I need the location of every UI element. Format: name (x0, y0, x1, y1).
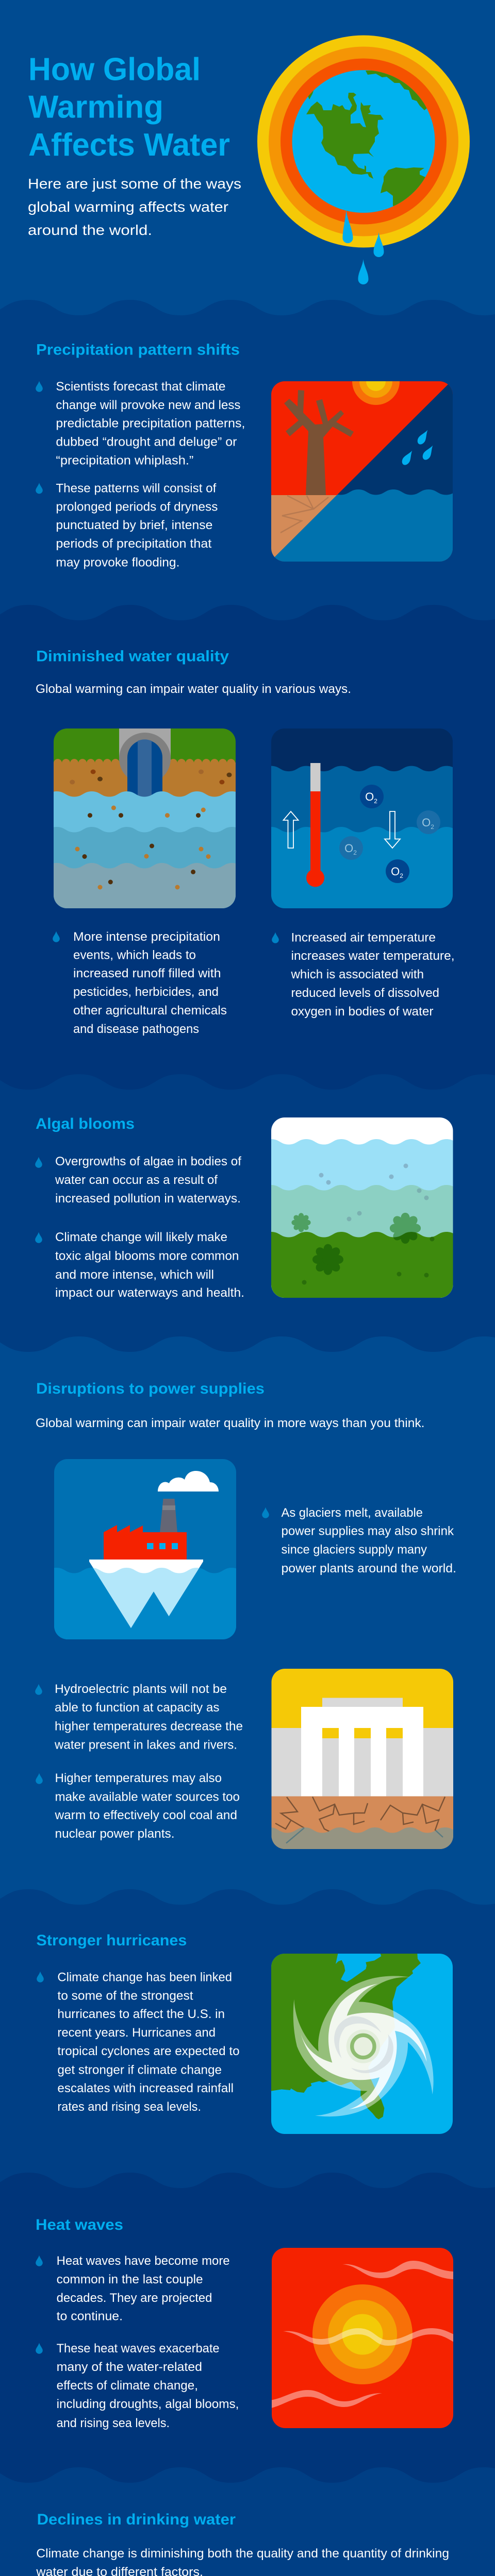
icon: oxygen molecules: 2 (431, 823, 434, 831)
icon: oxygen molecules: 2 (353, 849, 357, 856)
bullet text: cooling: warm to effectively cool coal and (54, 1808, 237, 1822)
illustration: warming water and oxygen (271, 728, 453, 908)
bullet text: hurricanes: get stronger if climate change (57, 2063, 222, 2077)
icon: oxygen molecules: O (422, 816, 431, 829)
bullet text: heat waves common (36, 2254, 230, 2324)
bullet text: glaciers: power supplies may also shrink (282, 1524, 454, 1538)
title: How Global (28, 52, 201, 87)
bullet text: toxic blooms (35, 1230, 244, 1300)
land and swirl drawn at 3x local coordinates (271, 1954, 434, 2120)
illustration: power plant on iceberg (54, 1459, 236, 1639)
heading: Stronger hurricanes (36, 1932, 187, 1949)
bullet text: hydroelectric: higher temperatures decrease the (55, 1720, 243, 1733)
bullet text: runoff (53, 930, 227, 1036)
illustration: dam and dried river (271, 1669, 453, 1849)
bullet text: exacerbated effects: and rising sea levels. (57, 2416, 170, 2430)
icon: algae clusters (291, 1213, 421, 1275)
illustration: drought and deluge (271, 381, 453, 562)
bullet text: forecast: Scientists forecast that climate (56, 380, 225, 394)
bullet text: forecast: predictable precipitation patterns, (56, 416, 245, 430)
cracked ground (275, 1797, 446, 1832)
icon: thermometer (306, 763, 324, 887)
bullet text: hurricanes: to some of the strongest (57, 1989, 193, 2003)
bullet text: runoff: increased runoff filled with (73, 967, 221, 980)
icon: drain pipe (119, 728, 171, 804)
intro text: global warming affects water (28, 199, 228, 215)
illustration: sun and heat ribbons (271, 2248, 454, 2428)
bullet text: toxic blooms: and more intense, which will (55, 1268, 214, 1282)
bullet text: patterns: may provoke flooding. (56, 556, 179, 570)
bullet text: temperature: which is associated with (290, 968, 424, 981)
heading: Diminished water quality (36, 648, 229, 665)
title: Affects Water (28, 127, 230, 163)
bullet text: cooling: Higher temperatures may also (55, 1771, 222, 1785)
bullet text: heat waves common: to continue. (57, 2309, 123, 2324)
bullet text: hurricanes: rates and rising sea levels. (57, 2100, 201, 2114)
heading: Algal blooms (36, 1115, 135, 1132)
intro text: Global warming can impair water quality in various ways. (36, 682, 351, 696)
title: Warming (28, 90, 163, 125)
bullet text: overgrowths (35, 1155, 241, 1206)
panel: diminished water quality (36, 650, 454, 1036)
icon: dam (301, 1707, 423, 1797)
bullet text: hurricanes: tropical cyclones are expected to (57, 2044, 240, 2058)
icon: oxygen molecules: 2 (374, 798, 377, 805)
icon: rain drops (402, 430, 433, 465)
bullet text: glaciers: power plants around the world. (282, 1562, 456, 1575)
bullet text: temperature: oxygen in bodies of water (291, 1005, 434, 1019)
panel: disruptions to power supplies (35, 1383, 455, 1849)
bullet text: forecast (36, 380, 245, 468)
bullet text: forecast: dubbed “drought and deluge” or (56, 435, 237, 449)
bullet text: temperature: reduced levels of dissolved (291, 986, 439, 1000)
icon: sun (312, 2284, 412, 2384)
bullet text: glaciers (262, 1506, 456, 1575)
bullet text: toxic blooms: impact our waterways and health. (55, 1286, 244, 1300)
bullet text: cooling: nuclear power plants. (55, 1827, 174, 1841)
bullet text: temperature (272, 931, 455, 1019)
title (28, 52, 230, 163)
icon: iceberg (89, 1560, 203, 1628)
intro text: around the world. (28, 222, 152, 238)
bullet text: exacerbated effects: These heat waves exacerbate (57, 2342, 220, 2355)
icon: factory (104, 1499, 187, 1560)
bullet text: runoff: and disease pathogens (73, 1022, 199, 1036)
intro text: Global warming can impair water quality in more ways than you think. (36, 1416, 425, 1430)
bullet text: hurricanes (37, 1970, 240, 2114)
intro text: Climate change is diminishing both the quality and the quantity of drinking (36, 2547, 449, 2561)
intro text: Here are just some of the ways (28, 176, 241, 192)
panel: declines in drinking water (22, 2511, 495, 2576)
bullet text: hydroelectric: Hydroelectric plants will not be (55, 1682, 227, 1696)
heading: Disruptions to power supplies (36, 1380, 265, 1397)
icon: water drips (342, 210, 384, 284)
bullet text: hydroelectric (35, 1682, 243, 1752)
panel: heat waves (36, 2216, 454, 2430)
bullet text: patterns: prolonged periods of dryness (56, 500, 218, 514)
heading: Precipitation pattern shifts (36, 342, 240, 359)
bullet text: hurricanes: Climate change has been linked (57, 1970, 232, 1985)
bullet text: exacerbated effects (36, 2342, 239, 2430)
illustration: algae in water (271, 1117, 453, 1298)
intro text (36, 2547, 449, 2576)
icon: dead tree (284, 390, 354, 495)
bullet text: heat waves common: common in the last couple (57, 2273, 203, 2286)
bullet text: hydroelectric: able to function at capacity as (55, 1701, 220, 1715)
bullet text: hurricanes: hurricanes to affect the U.S. in (57, 2007, 225, 2021)
bullet text: exacerbated effects: including droughts, algal blooms, (57, 2397, 239, 2411)
bullet text: heat waves common: decades. They are projected (57, 2291, 212, 2305)
bullet text: runoff: events, which leads to (73, 948, 196, 962)
intro text (28, 176, 241, 238)
bullet text: exacerbated effects: effects of climate change, (57, 2379, 198, 2393)
icon: sun (352, 381, 400, 405)
icon: hurricane swirl (293, 1976, 434, 2116)
icon: cloud (158, 1471, 219, 1492)
bullet text: runoff: pesticides, herbicides, and (73, 985, 219, 999)
bullet text: heat waves common: Heat waves have become more (57, 2254, 230, 2268)
illustration: hurricane over coast (271, 1954, 453, 2134)
bullet text: overgrowths: water can occur as a result of (55, 1173, 218, 1187)
bullet text: forecast: change will provoke new and less (56, 398, 240, 412)
bullet text: overgrowths: Overgrowths of algae in bodies of (55, 1155, 241, 1168)
bullet text: toxic blooms: toxic algal blooms more common (55, 1249, 239, 1263)
bullet text: cooling: make available water sources too (55, 1790, 240, 1804)
heading: Declines in drinking water (37, 2511, 236, 2528)
bullet text: cooling (36, 1771, 240, 1841)
panel: stronger hurricanes (36, 1932, 453, 2134)
bullet text: toxic blooms: Climate change will likely make (55, 1230, 227, 1244)
bullet text: temperature: increases water temperature, (291, 949, 455, 963)
bullet text: forecast: “precipitation whiplash.” (56, 453, 193, 468)
panel: algal blooms (35, 1117, 453, 1299)
bullet text: hydroelectric: water present in lakes and rivers. (54, 1738, 237, 1752)
bullet text: exacerbated effects: many of the water-related (57, 2360, 202, 2374)
icon: oxygen molecules: O (391, 865, 400, 878)
bullet text: glaciers: since glaciers supply many (282, 1543, 427, 1557)
bullet text: patterns: periods of precipitation that (56, 537, 212, 551)
icon: heat ribbons (271, 2261, 454, 2408)
bullet text: hurricanes: recent years. Hurricanes and (57, 2026, 216, 2040)
bullet text: glaciers: As glaciers melt, available (282, 1506, 423, 1520)
bullet text: temperature: Increased air temperature (291, 931, 436, 945)
heading: Heat waves (36, 2216, 123, 2233)
bullet text: overgrowths: increased pollution in waterways. (55, 1192, 241, 1206)
panel: precipitation pattern shifts (36, 344, 453, 569)
illustration: polluted runoff (54, 728, 236, 908)
bullet text: patterns: punctuated by brief, intense (56, 518, 212, 532)
bullet text: runoff: other agricultural chemicals (73, 1004, 227, 1018)
icon: oxygen molecules (339, 785, 440, 883)
icon: oxygen molecules: O (344, 842, 353, 855)
icon: melting globe with sun rings (257, 35, 470, 284)
bullet text: patterns: These patterns will consist of (56, 481, 217, 496)
bullet text: hurricanes: escalates with increased rainfall (57, 2081, 234, 2095)
icon: up and down arrows (284, 811, 400, 848)
bullet text: runoff: More intense precipitation (73, 930, 220, 944)
bullet text: patterns (36, 481, 218, 570)
icon: oxygen molecules: 2 (400, 872, 403, 879)
icon: oxygen molecules: O (365, 790, 374, 803)
